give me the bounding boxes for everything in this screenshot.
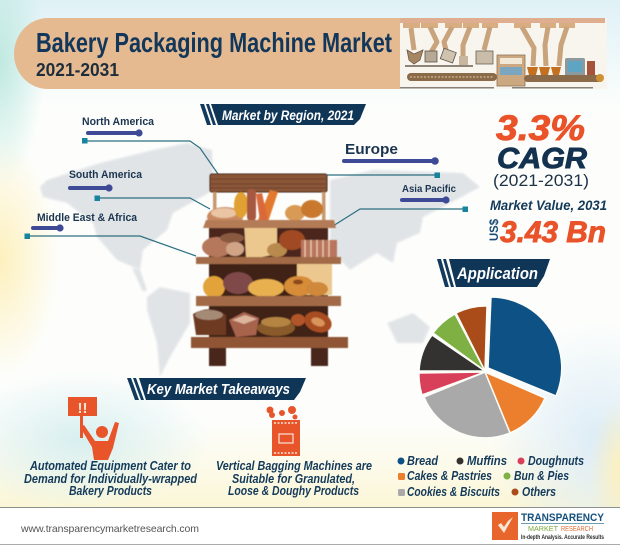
pie legend: Doughnuts xyxy=(528,454,584,468)
stat: CAGR: 3.3% xyxy=(496,109,585,148)
stat: market value xyxy=(489,198,607,249)
heading: application: Application xyxy=(456,264,538,283)
pie legend: Bread xyxy=(407,454,438,468)
slice: bread xyxy=(488,297,562,396)
slice: muffins xyxy=(419,335,485,371)
robot gripper xyxy=(407,50,423,64)
takeaway text: automated equipment xyxy=(24,459,197,498)
stat: market value: Market Value, 2031 xyxy=(490,198,607,213)
conveyor machine illustration xyxy=(400,18,607,89)
takeaway text: vertical bagging xyxy=(216,459,372,498)
heading: key market takeaways xyxy=(127,378,306,400)
stat: CAGR: (2021-2031) xyxy=(493,172,589,190)
title banner xyxy=(14,18,400,89)
second shelf plank xyxy=(196,257,341,264)
takeaway text: vertical bagging: Suitable for Granulated, xyxy=(232,472,355,486)
slice: doughnuts xyxy=(419,372,485,395)
heading: key market takeaways: Key Market Takeaways xyxy=(147,381,290,398)
control panel xyxy=(497,55,525,86)
footer xyxy=(0,507,620,545)
region: Asia Pacific: Asia Pacific xyxy=(402,183,456,195)
logo: Transparency Market Research: TRANSPARENCY xyxy=(521,512,605,524)
shelf header board xyxy=(210,174,327,192)
bottom shelf goods xyxy=(193,309,226,335)
icon: vertical bag with bakery pieces xyxy=(266,406,300,456)
heading: market by region: Market by Region, 2021 xyxy=(222,108,354,123)
region: Asia Pacific xyxy=(333,183,468,226)
third shelf goods xyxy=(297,264,332,295)
takeaway text: automated equipment: Bakery Products xyxy=(69,484,152,498)
region: Europe: Europe xyxy=(345,141,398,158)
region: South America: South America xyxy=(69,169,143,181)
second shelf goods xyxy=(202,237,232,257)
icon: person holding alert sign xyxy=(68,397,119,460)
logo: Transparency Market Research xyxy=(492,512,605,541)
heading: application xyxy=(437,259,550,287)
pie legend: Cookies & Biscuits xyxy=(407,485,500,499)
region: North America xyxy=(82,116,218,174)
region: South America xyxy=(69,169,210,209)
stat: market value: 3.43 Bn xyxy=(500,216,606,249)
takeaway text: vertical bagging: Loose & Doughy Products xyxy=(228,484,359,498)
website url: www.transparencymarketresearch.com xyxy=(20,523,199,535)
logo: Transparency Market Research: In-depth Analysis. Accurate Results xyxy=(521,535,605,541)
pie legend: Bun & Pies xyxy=(514,469,569,483)
pie legend: Cakes & Pastries xyxy=(407,469,492,483)
takeaway text: automated equipment: Demand for Individually-wrapped xyxy=(24,472,197,486)
region: Middle East and Africa xyxy=(24,212,196,256)
icon: person holding alert sign: !! xyxy=(78,400,88,417)
stat: CAGR: CAGR xyxy=(497,143,587,175)
takeaway text: vertical bagging: Vertical Bagging Machines are xyxy=(216,459,372,473)
region: Europe xyxy=(327,141,440,178)
region: North America: North America xyxy=(82,116,155,128)
world map backdrop xyxy=(40,143,480,377)
heading: market by region xyxy=(200,104,366,125)
pie legend: Muffins xyxy=(467,454,507,468)
stat: CAGR xyxy=(493,109,589,190)
pie legend xyxy=(398,454,584,499)
pie chart: application share xyxy=(419,297,562,438)
slice: cakes and pastries xyxy=(485,372,545,433)
title years: 2021-2031 xyxy=(36,60,119,80)
title heading: Bakery Packaging Machine Market xyxy=(36,27,392,58)
takeaway text: automated equipment: Automated Equipment Cater to xyxy=(29,459,191,473)
third shelf plank xyxy=(196,296,341,306)
stat: market value: US$ xyxy=(489,218,501,241)
pie legend: Others xyxy=(522,485,556,499)
logo: Transparency Market Research: MARKET xyxy=(528,524,558,533)
logo: Transparency Market Research: RESEARCH xyxy=(561,524,593,533)
slice: bun and pies xyxy=(433,314,485,371)
region: Middle East and Africa: Middle East & Africa xyxy=(37,212,138,224)
bakery shelf illustration xyxy=(191,174,348,366)
teal monitor xyxy=(565,58,585,77)
bottom shelf base xyxy=(191,337,348,348)
top shelf plank xyxy=(203,220,336,228)
slice: cookies and biscuits xyxy=(424,372,510,438)
slice: others xyxy=(456,306,487,371)
top shelf goods xyxy=(207,207,243,227)
